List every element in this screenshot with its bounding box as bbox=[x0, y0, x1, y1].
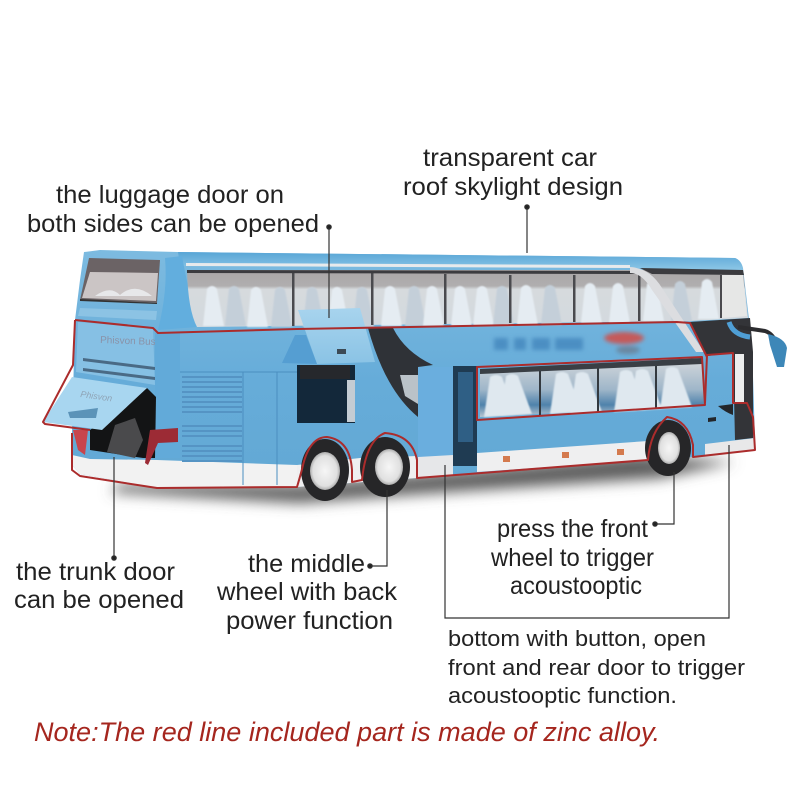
callout text: bottom button: bottom with button, open bbox=[448, 626, 706, 651]
callout text: luggage door bbox=[27, 181, 319, 238]
rear panel bbox=[76, 322, 155, 385]
callout: trunk door leader bbox=[112, 457, 116, 560]
front wheel bbox=[645, 420, 691, 476]
lower white skirt bbox=[72, 438, 755, 488]
callout text: front wheel bbox=[490, 515, 654, 600]
callout text: middle wheel bbox=[216, 550, 398, 635]
double-decker bus bbox=[43, 250, 787, 501]
callout text: middle wheel: the middle bbox=[248, 550, 365, 578]
rear brand text: Phisvon Bus bbox=[100, 335, 156, 348]
callout text: front wheel: wheel to trigger bbox=[490, 544, 654, 572]
callout text: luggage door: the luggage door on bbox=[56, 181, 284, 209]
ground shadow bbox=[110, 455, 735, 503]
white diagonal pillar bbox=[630, 267, 704, 352]
red zinc alloy outline bbox=[43, 320, 755, 488]
callout text: middle wheel: power function bbox=[226, 607, 393, 635]
window pillars bbox=[292, 272, 722, 326]
open trunk door: Phisvon bbox=[80, 389, 113, 403]
front dark mask panel bbox=[690, 318, 753, 440]
rear vent slots bbox=[83, 358, 155, 380]
front side glass sliver bbox=[735, 354, 744, 404]
upper windows bbox=[187, 267, 748, 352]
callout text: roof skylight: roof skylight design bbox=[403, 173, 623, 201]
callout text: trunk door: can be opened bbox=[14, 586, 184, 614]
callout text: front wheel: acoustooptic bbox=[510, 572, 642, 600]
seats upper bbox=[203, 279, 719, 327]
lower front window stub bbox=[400, 375, 418, 404]
callout: luggage door leader bbox=[327, 225, 331, 318]
callout: roof skylight leader bbox=[525, 205, 529, 253]
open luggage door bbox=[282, 308, 375, 364]
cargo door seams bbox=[180, 372, 297, 485]
open middle door bbox=[418, 366, 477, 478]
seats lower bbox=[484, 367, 692, 417]
callout text: bottom button: front and rear door to trigger bbox=[448, 655, 746, 680]
callout text: bottom button: acoustooptic function. bbox=[448, 683, 677, 708]
blurred side lettering bbox=[494, 338, 583, 350]
lower windows bbox=[480, 358, 704, 417]
wing mirror bbox=[729, 322, 787, 367]
tail lights bbox=[73, 428, 178, 465]
callout: bottom button bracket leader bbox=[445, 445, 729, 618]
callout text: trunk door bbox=[14, 558, 184, 614]
callout text: middle wheel: wheel with back bbox=[216, 578, 398, 606]
window top frame bbox=[187, 268, 744, 275]
front windscreen pane bbox=[722, 275, 747, 318]
blurred side logo bbox=[604, 332, 644, 354]
roof strip bbox=[178, 252, 743, 270]
side vent grille bbox=[182, 376, 242, 462]
callout: middle wheel leader bbox=[368, 490, 387, 568]
rear corner pillar bbox=[155, 333, 180, 458]
engine bay bbox=[90, 388, 156, 458]
rear wheel 2 bbox=[360, 437, 410, 497]
note: zinc alloy: Note:The red line included part is made of zinc alloy. bbox=[34, 717, 660, 747]
rear window bbox=[78, 258, 160, 320]
bus body bbox=[72, 250, 755, 488]
callout: front wheel leader bbox=[653, 472, 674, 526]
callout text: roof skylight: transparent car bbox=[423, 144, 597, 172]
marker lights bbox=[503, 449, 624, 462]
dark sweep crescent bbox=[368, 328, 433, 417]
open trunk door bbox=[43, 377, 147, 430]
rear pillar bbox=[158, 256, 197, 330]
callout text: trunk door: the trunk door bbox=[16, 558, 175, 586]
luggage bay opening bbox=[297, 365, 355, 423]
front door handle bbox=[708, 404, 733, 422]
roof white trim bbox=[186, 263, 630, 268]
rear wheel 1 bbox=[301, 439, 349, 501]
callout text: bottom button bbox=[448, 626, 746, 708]
callout text: roof skylight bbox=[403, 144, 623, 201]
lower window pillars bbox=[539, 364, 657, 415]
callout text: front wheel: press the front bbox=[497, 515, 648, 543]
callout text: luggage door: both sides can be opened bbox=[27, 210, 319, 238]
